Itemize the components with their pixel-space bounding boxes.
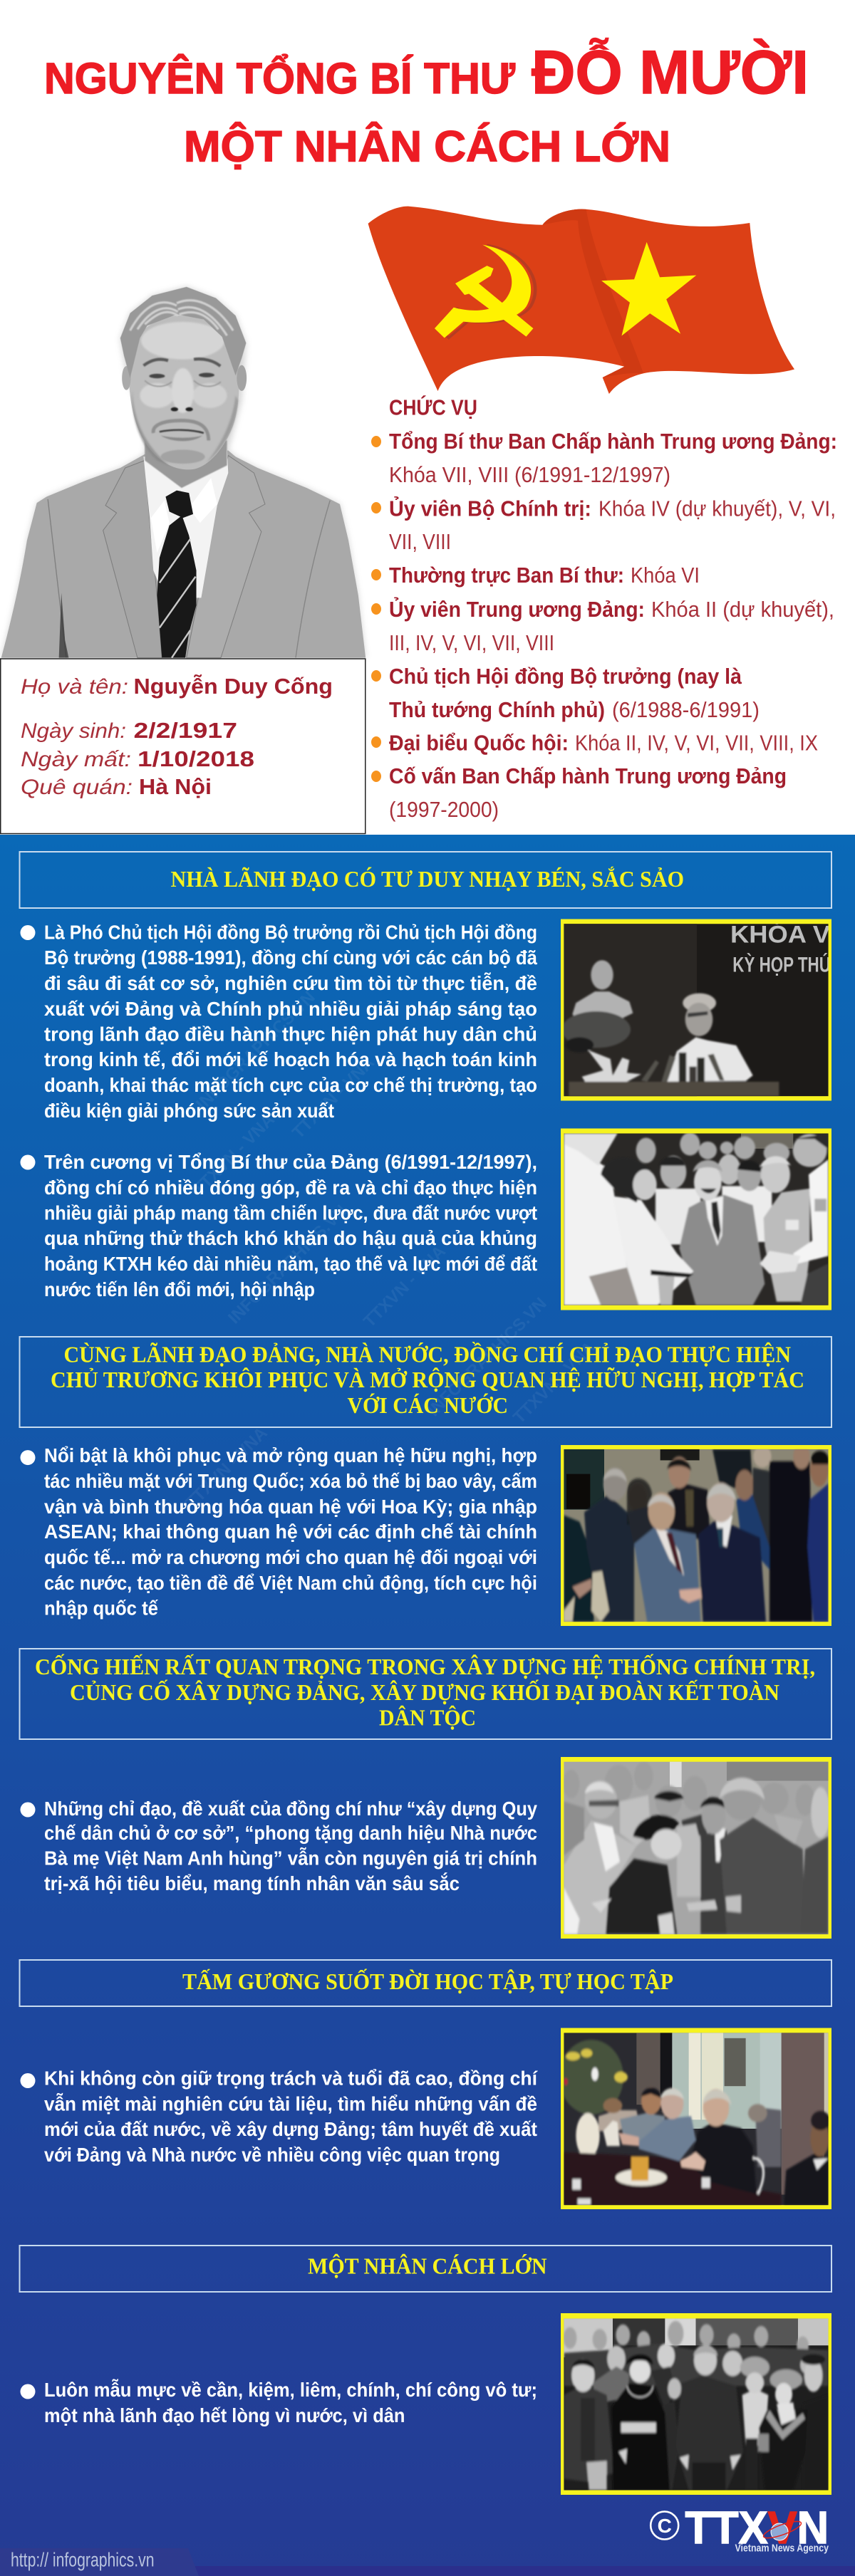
section 2 paragraph — [20, 1444, 537, 1620]
section 4 paragraph — [20, 2067, 538, 2166]
list lines: (6/1988-6/1991) — [612, 697, 760, 722]
footer strip — [0, 2566, 855, 2576]
text: hometown: Hà Nội — [139, 774, 212, 799]
title — [44, 38, 809, 171]
text: hometown — [21, 774, 212, 799]
panel: positions held list — [371, 395, 837, 822]
section 2 paragraph: nhập quốc tế — [44, 1597, 158, 1620]
watermarks: TTXVN - VNA — [360, 1242, 450, 1331]
watermarks: TTXVN - VNA — [189, 1110, 279, 1199]
portrait photo — [1, 287, 366, 658]
photo: speaking at podium: KỲ HỌP THỨ — [732, 951, 833, 977]
section 3 paragraph: Những chỉ đạo, đề xuất của đồng chí như “xây dựng Quy — [44, 1798, 537, 1820]
section 3 paragraph: trị-xã hội tiêu biểu, mang tính nhân văn sâu sắc — [44, 1872, 460, 1894]
section 1 paragraph 1 — [20, 921, 537, 1122]
section 3 paragraph: chế dân chủ ở cơ sở”, “phong tặng danh hiệu Nhà nước — [44, 1822, 537, 1844]
section 1 paragraph 2: đồng chí có nhiều đóng góp, đề ra và chỉ đạo thực hiện — [44, 1177, 537, 1199]
list bullets — [371, 436, 381, 782]
title: NGUYÊN TỔNG BÍ THƯ — [44, 53, 515, 103]
icon: TTXVN logo: TTXVN — [685, 2502, 829, 2553]
section 1 paragraph 1: điều kiện giải phóng sức sản xuất — [44, 1100, 334, 1122]
section 3 paragraph: Bà mẹ Việt Nam Anh hùng” vẫn còn nguyên giá trị chính — [44, 1847, 537, 1869]
panel: white header background — [0, 0, 855, 835]
section 1 paragraph 1: trong lãnh đạo điều hành thực hiện phát huy dân chủ — [44, 1023, 537, 1045]
heading box 3: CỐNG HIẾN RẤT QUAN TRỌNG TRONG XÂY DỰNG HỆ THỐNG CHÍNH TRỊ, — [35, 1654, 815, 1679]
section 1 paragraph 2: Trên cương vị Tổng Bí thư của Đảng (6/1991-12/1997), — [44, 1151, 537, 1173]
section 2 paragraph: vận và bình thường hóa quan hệ với Hoa Kỳ; gia nhập — [44, 1496, 537, 1518]
watermarks: TTXVN - VNA — [289, 1053, 378, 1142]
section 2 paragraph: ASEAN; khai thông quan hệ với các định chế tài chính — [44, 1521, 537, 1543]
list lines: Thường trực Ban Bí thư: — [389, 563, 624, 588]
heading box 3: CỦNG CỐ XÂY DỰNG ĐẢNG, XÂY DỰNG KHỐI ĐẠI ĐOÀN KẾT TOÀN — [70, 1679, 779, 1705]
section 4 paragraph: Khi không còn giữ trọng trách và tuổi đã cao, đồng chí — [44, 2067, 538, 2089]
section 1 paragraph 2 — [20, 1151, 537, 1300]
heading box 2 — [20, 1337, 831, 1427]
section 1 paragraph 2: qua những thử thách khó khăn do hậu quả của khủng — [44, 1227, 537, 1249]
section 1 paragraph 1: xuất với Đảng và Chính phủ nhiều giải pháp sáng tạo — [44, 998, 537, 1020]
list lines — [389, 429, 837, 822]
text: date of death — [21, 746, 254, 771]
watermarks: INFOGRAPHICS.VN — [424, 1294, 551, 1420]
section 1 paragraph 1: trong kinh tế, đổi mới kế hoạch hóa và hạch toán kinh — [44, 1048, 537, 1070]
heading box 3: DÂN TỘC — [379, 1705, 476, 1731]
heading box 4: TẤM GƯƠNG SUỐT ĐỜI HỌC TẬP, TỰ HỌC TẬP — [182, 1968, 673, 1994]
heading box 4 — [20, 1960, 831, 2006]
section 1 paragraph 1: Bộ trưởng (1988-1991), đồng chí cùng với các cán bộ đã — [44, 947, 537, 969]
photo: speaking at podium — [561, 921, 833, 1096]
list lines: Cố vấn Ban Chấp hành Trung ương Đảng — [389, 763, 787, 788]
list lines: Khóa II, IV, V, VI, VII, VIII, IX — [575, 731, 818, 755]
text: hometown: Quê quán: — [21, 776, 133, 799]
heading box 1: NHÀ LÃNH ĐẠO CÓ TƯ DUY NHẠY BÉN, SẮC SẢO — [171, 866, 684, 892]
section 1 paragraph 2: hoảng KTXH kéo dài nhiều năm, tạo thế và lực mới để đất — [44, 1253, 537, 1275]
text: full name — [21, 674, 333, 699]
section 4 paragraph: với Đảng và Nhà nước về nhiều công việc quan trọng — [44, 2144, 500, 2166]
list lines: (1997-2000) — [389, 797, 499, 822]
photo: group with ethnic minority delegates — [564, 2318, 829, 2491]
heading box 5 — [20, 2246, 831, 2292]
section 1 paragraph 2: nước tiến lên đổi mới, hội nhập — [44, 1278, 315, 1300]
title: MỘT NHÂN CÁCH LỚN — [184, 122, 670, 171]
watermarks: INFOGRAPHICS.VN — [192, 988, 319, 1114]
photo: meeting with elderly woman — [563, 1762, 830, 1934]
list lines: Khóa VII, VIII (6/1991-12/1997) — [389, 462, 670, 487]
list lines: Khóa IV (dự khuyết), V, VI, — [598, 496, 836, 521]
photo: colour meeting at table — [559, 2033, 830, 2205]
section 4 paragraph: vẫn miệt mài nghiên cứu tài liệu, tìm hiểu những vấn đề — [44, 2092, 537, 2115]
text: date of death: Ngày mất: — [21, 748, 131, 771]
section 2 paragraph: Nổi bật là khôi phục và mở rộng quan hệ hữu nghị, hợp — [44, 1444, 537, 1466]
photo: diplomatic handshake — [564, 1444, 829, 1622]
list lines: Đại biểu Quốc hội: — [389, 731, 569, 755]
heading box 2: VỚI CÁC NƯỚC — [348, 1392, 508, 1418]
text: date of birth: 2/2/1917 — [134, 718, 237, 743]
list lines: Chủ tịch Hội đồng Bộ trưởng (nay là — [389, 664, 742, 689]
icon: TTXVN logo: C — [658, 2515, 672, 2537]
section 5 paragraph: Luôn mẫu mực về cần, kiệm, liêm, chính, chí công vô tư; — [44, 2379, 537, 2401]
section 3 paragraph — [20, 1798, 537, 1894]
footer tab with website url: http:// infographics.vn — [11, 2548, 154, 2571]
text: date of birth — [21, 718, 237, 743]
list lines: Khóa VI — [631, 563, 700, 588]
section 1 paragraph 1: doanh, khai thác mặt tích cực của cơ chế thị trường, tạo — [44, 1074, 537, 1096]
section 5 paragraph: một nhà lãnh đạo hết lòng vì nước, vì dân — [44, 2404, 405, 2426]
section 1 paragraph 1: Là Phó Chủ tịch Hội đồng Bộ trưởng rồi Chủ tịch Hội đồng — [44, 921, 537, 943]
heading box 2: CHỦ TRƯƠNG KHÔI PHỤC VÀ MỞ RỘNG QUAN HỆ HỮU NGHỊ, HỢP TÁC — [51, 1367, 804, 1392]
list lines: Thủ tướng Chính phủ) — [389, 697, 605, 722]
photo: speaking at podium: KHÓA V — [730, 921, 830, 949]
panel: personal info box — [1, 659, 366, 833]
heading: positions: CHỨC VỤ — [389, 395, 477, 420]
title: ĐỖ MƯỜI — [532, 38, 809, 107]
text: date of birth: Ngày sinh: — [21, 719, 126, 743]
heading box 2: CÙNG LÃNH ĐẠO ĐẢNG, NHÀ NƯỚC, ĐỒNG CHÍ CHỈ ĐẠO THỰC HIỆN — [64, 1342, 791, 1367]
list lines: Ủy viên Bộ Chính trị: — [389, 496, 591, 521]
panel: blue gradient content background — [0, 835, 855, 2576]
list lines: Khóa II (dự khuyết), — [651, 597, 834, 622]
heading box 3 — [20, 1649, 831, 1739]
watermarks: TTXVN - VNA — [182, 1424, 271, 1513]
icon: TTXVN logo: Vietnam News Agency — [735, 2543, 829, 2555]
watermarks — [182, 988, 599, 1513]
list lines: III, IV, V, VI, VII, VIII — [389, 630, 554, 655]
photo: greeting delegates — [564, 1132, 829, 1305]
heading box 5: MỘT NHÂN CÁCH LỚN — [308, 2253, 547, 2279]
watermarks: INFOGRAPHICS.VN — [224, 1201, 351, 1328]
photo frames for sections 1 — [561, 919, 831, 1310]
section 2 paragraph: tác nhiều mặt với Trung Quốc; xóa bỏ thế bị bao vây, cấm — [44, 1470, 537, 1492]
photo frames for sections 4 and 5 — [561, 2028, 831, 2495]
text: date of death: 1/10/2018 — [138, 746, 254, 771]
list lines: VII, VIII — [389, 529, 451, 554]
section 1 paragraph 1: đi sâu đi sát cơ sở, nghiên cứu tìm tòi từ thực tiễn, đề — [44, 972, 537, 994]
watermarks: TTXVN - VNA — [509, 1338, 599, 1427]
section 2 paragraph: các nước, tạo tiền đề để Việt Nam chủ động, tích cực hội — [44, 1572, 537, 1594]
section 2 paragraph: quốc tế... mở ra chương mới cho quan hệ đối ngoại với — [44, 1546, 537, 1568]
heading box 1 — [20, 852, 831, 908]
section 4 paragraph: mới của đất nước, về xây dựng Đảng; tâm huyết đề xuất — [44, 2118, 537, 2140]
text: full name: Họ và tên: — [21, 675, 128, 699]
list lines: Ủy viên Trung ương Đảng: — [389, 596, 645, 622]
photo frames for sections 2 and 3 — [561, 1445, 831, 1939]
section 1 paragraph 2: nhiều giải pháp mang tầm chiến lược, đưa đất nước vượt — [44, 1202, 537, 1224]
text: full name: Nguyễn Duy Cống — [134, 674, 333, 699]
icon: party flag with hammer, sickle and star — [368, 207, 794, 394]
section 5 paragraph — [20, 2379, 537, 2426]
